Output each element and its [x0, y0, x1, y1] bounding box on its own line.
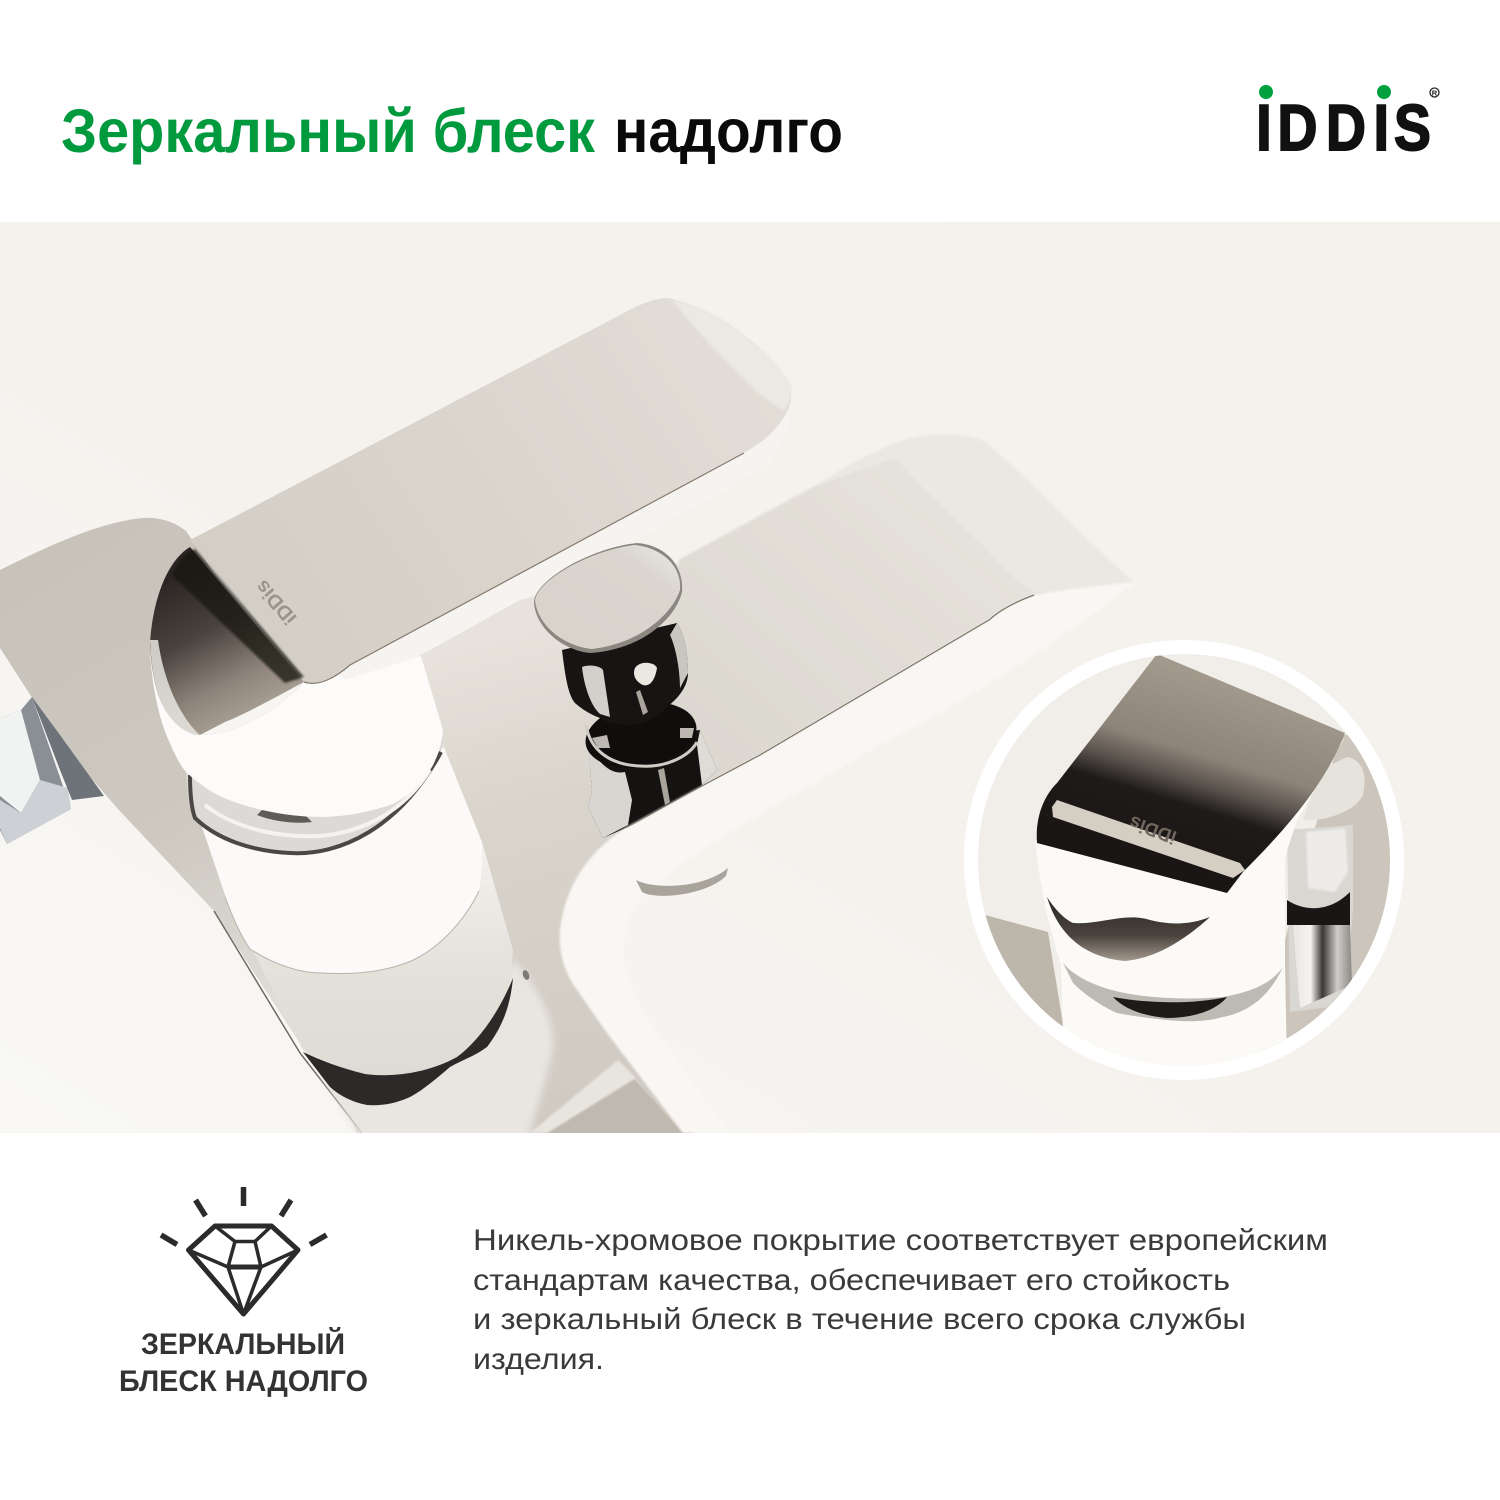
title: Зеркальный блеск	[61, 97, 595, 165]
face lower highlight	[200, 682, 304, 735]
handle lever lip	[420, 600, 520, 655]
inset background	[978, 654, 1348, 1020]
description text: изделия.	[473, 1343, 604, 1376]
icon label	[119, 1327, 368, 1398]
lever far end highlight	[672, 300, 792, 410]
knob cap	[534, 543, 682, 653]
logo: iddis: D	[1326, 91, 1366, 164]
product photo panel	[0, 222, 1500, 1140]
lever dark face	[150, 547, 304, 735]
deck light band	[530, 1060, 636, 1133]
knob upper stem	[562, 623, 688, 725]
spout top surface light zone	[822, 436, 1131, 593]
left back plate	[0, 518, 338, 1096]
icon label: БЛЕСК НАДОЛГО	[119, 1365, 368, 1398]
cylinder middle body	[200, 745, 482, 974]
screw	[522, 970, 530, 980]
logo: iddis: R	[1432, 88, 1438, 98]
description text: Никель-хромовое покрытие соответствует европейским	[473, 1224, 1328, 1257]
inset knob cap	[1303, 757, 1365, 820]
inset white faucet body	[1035, 737, 1345, 1070]
inset circle magnifier	[964, 640, 1404, 1080]
knob collar ring	[586, 704, 696, 762]
plate edge line	[214, 911, 362, 1133]
icon: diamond with rays	[161, 1187, 326, 1314]
icon label: ЗЕРКАЛЬНЫЙ	[141, 1327, 345, 1361]
photo background	[0, 222, 1500, 1133]
inset deck	[1255, 735, 1390, 1054]
logo: iddis	[1256, 85, 1439, 164]
inset engraved logo: iDDis	[1127, 811, 1180, 847]
inset white ring	[964, 640, 1404, 1080]
left hex nut	[0, 697, 104, 844]
inset brushed strip	[1052, 800, 1245, 878]
base light surround	[322, 960, 553, 1140]
face ridge shadow	[172, 549, 304, 683]
dark base crescent	[303, 978, 513, 1105]
lever crisp edge	[304, 453, 744, 683]
inset chrome face	[1047, 897, 1210, 961]
cylinder lower body	[254, 842, 513, 1075]
deck lower darker patch	[547, 1078, 683, 1133]
spout top surface main	[674, 478, 992, 780]
pop-up knob	[534, 543, 717, 838]
inset chrome ring	[1063, 963, 1283, 1021]
handle skirt white	[150, 560, 443, 817]
inset shadow	[986, 915, 1064, 1027]
rays	[161, 1187, 326, 1244]
handle lever top	[190, 298, 791, 683]
face left rim	[150, 640, 200, 735]
description text	[473, 1224, 1328, 1376]
logo: iddis: I	[1256, 91, 1272, 164]
title: надолго	[614, 97, 843, 165]
drain base ring	[636, 868, 728, 896]
inset knob stem	[1287, 825, 1353, 1012]
diamond outline	[188, 1226, 298, 1314]
deck plate between handle and spout	[352, 563, 694, 1133]
spout crisp lip	[560, 582, 1135, 1133]
inset handle top	[1037, 654, 1345, 893]
engraved lever logo: iDDis	[251, 575, 302, 628]
description text: и зеркальный блеск в течение всего срока службы	[473, 1303, 1246, 1336]
knob lower cylinder	[588, 730, 717, 838]
chrome ring	[186, 745, 443, 852]
spout inner edge line	[627, 595, 1034, 827]
description text: стандартам качества, обеспечивает его стойкость	[473, 1264, 1230, 1297]
logo: iddis: I	[1374, 91, 1389, 164]
logo: iddis: S	[1394, 91, 1431, 164]
logo: iddis: D	[1278, 91, 1317, 164]
diamond facets	[188, 1226, 298, 1314]
